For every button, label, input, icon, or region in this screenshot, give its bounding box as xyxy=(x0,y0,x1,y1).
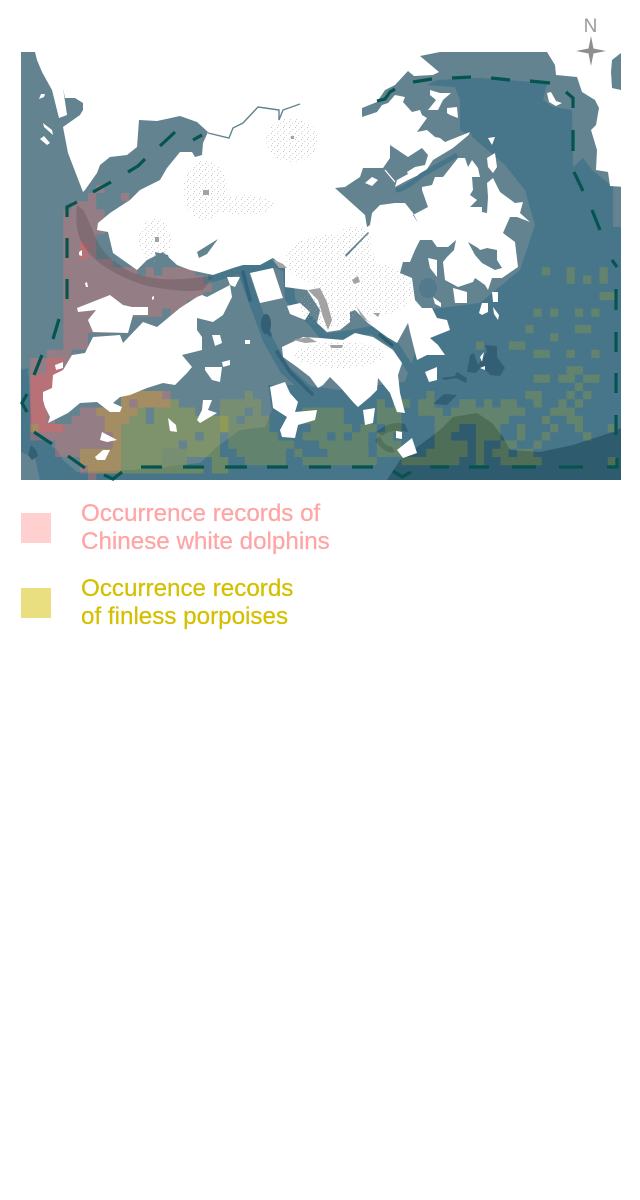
legend swatch: dolphins xyxy=(21,513,51,543)
Tolo bridge line xyxy=(385,170,395,182)
legend label: dolphins: Chinese white dolphins xyxy=(81,528,330,555)
water: dark shoals xyxy=(28,314,505,460)
river on the northern boundary xyxy=(208,104,300,138)
water: north-east corner fragment xyxy=(611,53,621,90)
legend label: porpoises xyxy=(81,575,293,630)
legend label: dolphins xyxy=(81,500,330,555)
grid: finless porpoise records, western dense area xyxy=(30,391,228,474)
marine park boundary dashes xyxy=(22,77,617,479)
compass: north arrow xyxy=(576,16,606,66)
water: Long Harbour inlet in Sai Kung peninsula xyxy=(468,242,502,270)
grid: Chinese white dolphin records xyxy=(30,185,616,482)
dolphin core habitat swath xyxy=(76,205,213,291)
land: eastern corner xyxy=(547,46,625,187)
legend swatch: porpoises xyxy=(21,588,51,618)
built-up speckle xyxy=(139,118,413,368)
built-up dense grey areas xyxy=(155,136,380,348)
water: Tolo channel dark xyxy=(396,155,457,190)
grid: finless porpoise records, eastern sparse area xyxy=(162,267,616,465)
legend label: porpoises: Occurrence records xyxy=(81,575,293,602)
land: islands xyxy=(39,90,562,460)
land: Hong Kong Island xyxy=(282,333,405,413)
small water inlets in urban land xyxy=(155,232,369,262)
water: deep sea at south-east xyxy=(387,413,621,480)
water: Tolo Harbour and Shatin xyxy=(335,133,472,227)
land: New Territories and Kowloon xyxy=(33,46,530,360)
land: airport island xyxy=(77,295,148,333)
water: shipping channels xyxy=(213,262,412,402)
compass: north arrow: N xyxy=(584,16,597,37)
water: light south-west wedge xyxy=(21,452,40,480)
legend label: dolphins: Occurrence records of xyxy=(81,500,320,527)
water: outer light sea xyxy=(21,52,621,480)
map: Hong Kong waters with species occurrence grid xyxy=(20,16,621,481)
land: Lantau Island xyxy=(43,285,232,423)
water: inner darker sea xyxy=(21,78,621,480)
legend label: porpoises: of finless porpoises xyxy=(81,603,288,630)
